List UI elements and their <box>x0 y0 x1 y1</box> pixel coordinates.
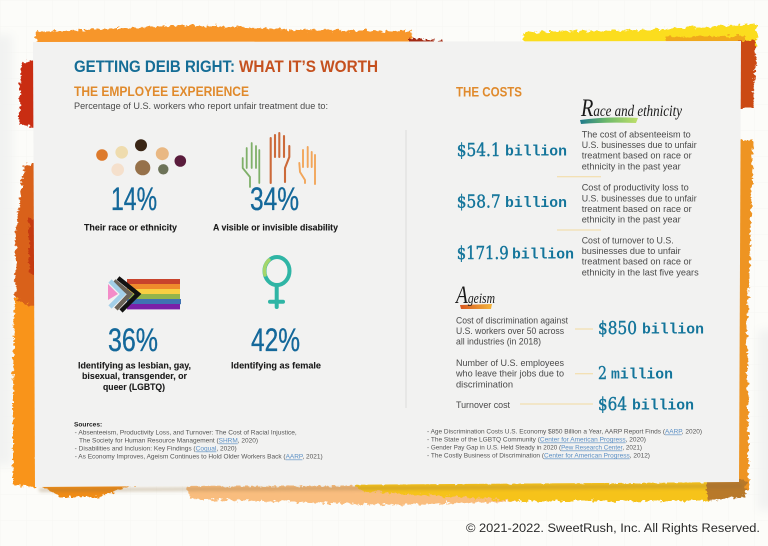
sources: right: - Gender Pay Gap in U.S. Held Steady in 2020 (Pew Research Center, 2021) <box>427 444 642 452</box>
cost: $64 billion: Turnover cost <box>456 399 510 410</box>
title: GETTING DEIB RIGHT: <box>74 58 235 76</box>
stat: race or ethnicity <box>84 139 186 232</box>
sources: left <box>74 422 323 460</box>
main panel <box>33 41 741 487</box>
sources: right: - Age Discrimination Costs U.S. Economy $850 Billion a Year, AARP Report Finds (AARP, 2020) <box>427 428 702 436</box>
cost: $58.7 billion: ethnicity in the past year <box>582 214 681 225</box>
heading: the costs: THE COSTS <box>456 84 522 100</box>
sources: right: - The Costly Business of Discrimination (Center for American Progress, 2012) <box>427 452 650 460</box>
cost: 2 million: who leave their jobs due to <box>455 368 564 379</box>
cost: $171.9 billion: $171.9 <box>457 244 509 264</box>
script heading: race and ethnicity: Race and ethnicity <box>580 95 683 122</box>
script heading: ageism: Ageism <box>454 282 495 309</box>
label: queer (LGBTQ) <box>103 382 165 392</box>
icon: progress pride flag <box>108 278 181 311</box>
copyright: © 2021-2022. SweetRush, Inc. All Rights Reserved. <box>466 521 760 535</box>
cost: $171.9 billion <box>457 234 699 277</box>
sources: left: - As Economy Improves, Ageism Continues to Hold Older Workers Back (AARP, 2021) <box>75 454 323 460</box>
cost: $171.9 billion: Cost of turnover to U.S. <box>582 234 674 245</box>
cost: $850 billion: billion <box>642 322 704 338</box>
sources: right <box>427 428 702 460</box>
icon: female symbol <box>264 257 290 307</box>
heading: the employee experience: THE EMPLOYEE EXPERIENCE <box>74 84 249 99</box>
stat: LGBTQ <box>78 278 191 392</box>
icon: raised hands <box>243 133 315 187</box>
cost: $58.7 billion <box>457 182 697 225</box>
value: 42%: 42% <box>251 322 300 358</box>
cost: $64 billion <box>456 395 694 415</box>
sources: left: The Society for Human Resource Management (SHRM, 2020) <box>79 438 258 444</box>
cost: $171.9 billion: ethnicity in the last five years <box>582 266 699 277</box>
cost: $850 billion: all industries (in 2018) <box>456 336 541 347</box>
cost: 2 million: 2 <box>598 364 607 384</box>
cost: $58.7 billion: treatment based on race or <box>582 203 692 214</box>
value: 14%: 14% <box>111 181 157 217</box>
title <box>74 58 378 76</box>
sources: right: - The State of the LGBTQ Community (Center for American Progress, 2020) <box>427 436 646 444</box>
cost: $64 billion: billion <box>632 398 694 414</box>
cost: $54.1 billion: U.S. businesses due to unfair <box>582 139 697 150</box>
intro text: Percentage of U.S. workers who report unfair treatment due to: <box>74 101 328 111</box>
label: A visible or invisible disability <box>213 222 339 232</box>
label: Their race or ethnicity <box>84 222 178 232</box>
cost: $58.7 billion: Cost of productivity loss to <box>582 182 689 193</box>
cost: $171.9 billion: treatment based on race or <box>582 256 692 267</box>
cost: $850 billion: $850 <box>598 319 637 339</box>
cost: 2 million: million <box>611 366 673 384</box>
cost: $54.1 billion: billion <box>505 144 567 160</box>
label: Identifying as female <box>231 360 321 370</box>
label: Identifying as lesbian, gay, <box>78 360 191 370</box>
cost: $64 billion: $64 <box>598 395 627 415</box>
cost: $58.7 billion: billion <box>505 195 567 212</box>
cost: $54.1 billion: ethnicity in the past year <box>582 160 681 171</box>
cost: $171.9 billion: billion <box>512 246 574 264</box>
cost: $54.1 billion <box>457 128 697 171</box>
cost: 2 million: Number of U.S. employees <box>456 357 564 368</box>
cost: $850 billion: U.S. workers over 50 across <box>456 325 564 336</box>
cost: $54.1 billion: The cost of absenteeism to <box>582 128 691 140</box>
cost: $58.7 billion: U.S. businesses due to unfair <box>582 192 697 203</box>
title: WHAT IT’S WORTH <box>239 58 378 76</box>
cost: 2 million: discrimination <box>456 378 513 390</box>
sources: left: Sources: <box>74 422 102 428</box>
cost: $54.1 billion: $54.1 <box>457 141 501 161</box>
cost: $54.1 billion: treatment based on race or <box>582 150 692 161</box>
label: bisexual, transgender, or <box>82 371 187 381</box>
cost: $850 billion <box>456 315 704 347</box>
panel shadow <box>38 484 742 492</box>
cost: $58.7 billion: $58.7 <box>457 192 501 212</box>
stat: disability <box>213 133 339 232</box>
stat: female <box>231 257 321 370</box>
sources: left: - Disabilities and Inclusion: Key Findings (Coqual, 2020) <box>75 446 237 452</box>
cost: $850 billion: Cost of discrimination against <box>456 315 568 326</box>
value: 34%: 34% <box>250 181 299 217</box>
cost: $171.9 billion: businesses due to unfair <box>582 245 681 256</box>
sources: left: - Absenteeism, Productivity Loss, and Turnover: The Cost of Racial Injustice, <box>75 430 297 436</box>
value: 36%: 36% <box>108 322 158 358</box>
icon: skin tone dots <box>96 139 186 176</box>
cost: 2 million <box>455 357 673 390</box>
label <box>78 360 191 392</box>
